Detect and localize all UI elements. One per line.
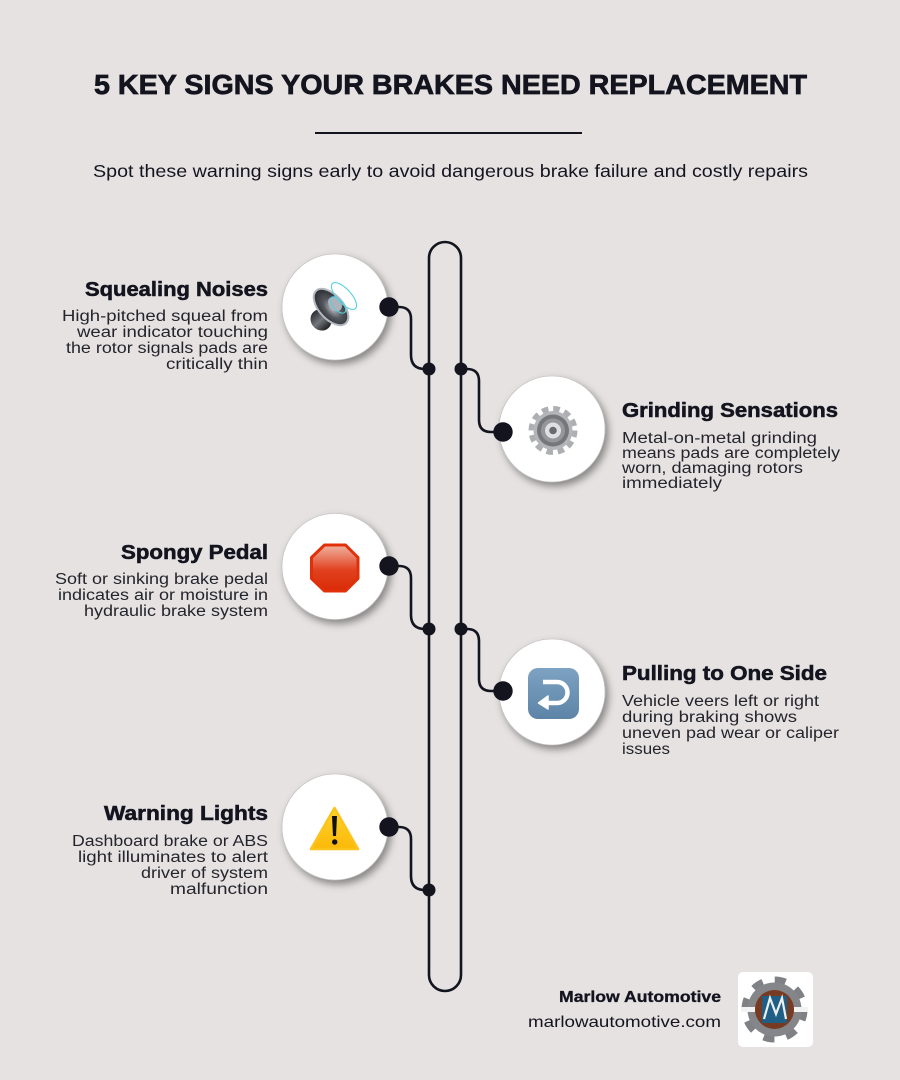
panel: spongy pedal (55, 514, 436, 636)
icon circle: gear (499, 376, 605, 482)
text: warning lights: driver of system (141, 865, 268, 882)
text: spongy pedal: hydraulic brake system (84, 603, 268, 620)
text: spongy pedal (55, 542, 268, 620)
icon circle: warning triangle (282, 774, 388, 880)
panel: squealing noises (62, 254, 436, 376)
text: warning lights: Dashboard brake or ABS (72, 833, 268, 850)
text: pulling to one side: issues (622, 741, 670, 758)
text: spongy pedal: indicates air or moisture in (58, 587, 268, 604)
central timeline track (429, 242, 461, 991)
text: pulling to one side (622, 663, 839, 758)
title: 5 KEY SIGNS YOUR BRAKES NEED REPLACEMENT (94, 69, 807, 100)
icon circle: stop sign (282, 514, 388, 620)
connector (454, 622, 513, 701)
text: squealing noises: the rotor signals pads are (66, 340, 268, 357)
text: grinding sensations (621, 400, 840, 492)
footer brand text: marlowautomotive.com (528, 1014, 721, 1031)
connector (379, 556, 436, 636)
text: grinding sensations: Metal-on-metal grinding (622, 430, 817, 447)
text: grinding sensations: means pads are completely (622, 445, 840, 462)
text: grinding sensations: Grinding Sensations (622, 400, 838, 422)
text: pulling to one side: Vehicle veers left or right (622, 693, 820, 710)
icon circle: speaker (282, 254, 388, 360)
text: squealing noises: critically thin (166, 356, 268, 373)
subtitle: Spot these warning signs early to avoid dangerous brake failure and costly repairs (93, 161, 808, 181)
connector (379, 297, 436, 376)
footer brand text: Marlow Automotive (559, 989, 721, 1006)
text: pulling to one side: during braking shows (622, 709, 797, 726)
text: warning lights: light illuminates to alert (78, 849, 269, 866)
logo (738, 972, 813, 1047)
text: warning lights: Warning Lights (104, 803, 268, 825)
panel: grinding sensations (454, 362, 840, 492)
text: warning lights (72, 803, 269, 898)
text: squealing noises: wear indicator touching (76, 324, 268, 341)
text: squealing noises: High-pitched squeal from (62, 308, 268, 325)
panel: warning lights (72, 774, 436, 898)
connector (454, 362, 513, 442)
connector (379, 817, 436, 896)
text: squealing noises: Squealing Noises (85, 279, 268, 301)
text: warning lights: malfunction (170, 881, 268, 898)
text: grinding sensations: immediately (622, 475, 722, 492)
panel: pulling to one side (454, 622, 839, 758)
text: spongy pedal: Spongy Pedal (121, 542, 268, 564)
footer brand text (528, 989, 721, 1031)
icon circle: return arrow (499, 639, 605, 745)
text: squealing noises (62, 279, 268, 373)
text: pulling to one side: Pulling to One Side (622, 663, 827, 685)
text: spongy pedal: Soft or sinking brake pedal (55, 571, 268, 588)
text: pulling to one side: uneven pad wear or caliper (622, 725, 839, 742)
text: grinding sensations: worn, damaging rotors (621, 460, 803, 477)
